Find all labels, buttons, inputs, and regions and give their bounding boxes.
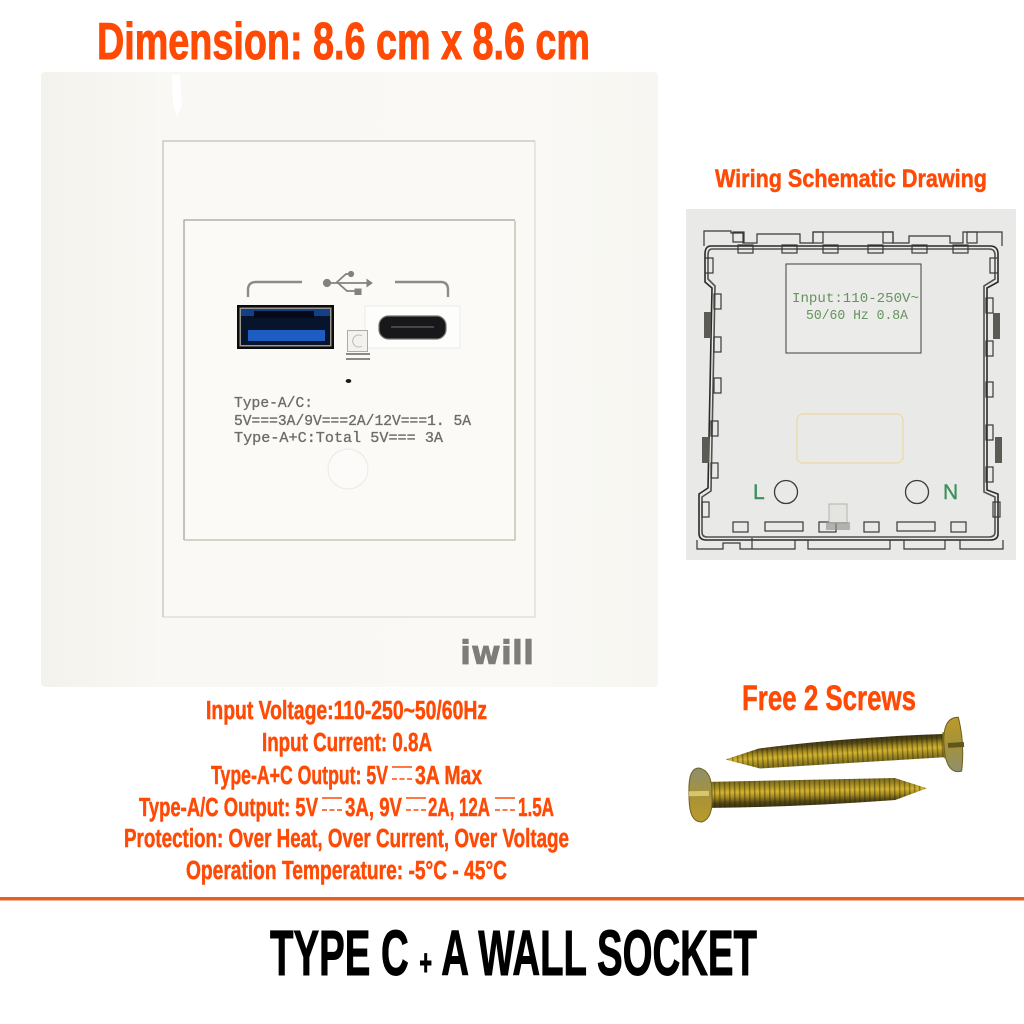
spec list: Type-A+C Output: 5V [211, 762, 388, 790]
icon: left bracket [248, 282, 302, 297]
socket outer plate [41, 72, 658, 687]
icon: upper screw [726, 716, 964, 772]
heading: free screws: Free 2 Screws [742, 679, 916, 718]
usb type-a port [237, 305, 334, 349]
input rating box: 50/60 Hz 0.8A [806, 309, 909, 324]
heading: wiring schematic: Wiring Schematic Drawing [715, 165, 987, 193]
input rating box [786, 264, 921, 353]
icon: lower screw [688, 763, 928, 822]
watermark stamp [826, 504, 850, 530]
printed spec text: Type-A+C:Total 5V=== 3A [234, 430, 443, 447]
socket module face [184, 220, 515, 540]
gloss highlight [172, 75, 182, 117]
label placeholder [797, 414, 903, 463]
spec list: 2A, 12A [428, 794, 490, 822]
touch button [328, 449, 368, 489]
printed spec text: 5V===3A/9V===2A/12V===1. 5A [234, 413, 471, 430]
terminal L: L [753, 481, 765, 504]
spec list: Type-A/C Output: 5V [139, 794, 318, 822]
input rating box: Input:110-250V~ [792, 292, 919, 307]
watermark stamp [346, 330, 370, 360]
socket inner frame [163, 141, 535, 617]
footer title: TYPE C + A WALL SOCKET [270, 917, 757, 989]
module frame outline [697, 231, 1003, 549]
printed spec text: Type-A/C: [234, 395, 313, 412]
terminal N: N [943, 481, 958, 504]
divider line [0, 897, 1024, 900]
panel: wall socket photo [41, 72, 658, 687]
spec list: Protection: Over Heat, Over Current, Over Voltage [124, 825, 569, 853]
spec list: Input Voltage:110-250~50/60Hz [206, 697, 487, 725]
terminal L [753, 480, 798, 504]
schematic paper [686, 209, 1016, 560]
printed spec text [234, 395, 471, 447]
icon: usb trident [323, 271, 372, 294]
spec list [124, 697, 569, 885]
spec list: 3A, 9V [345, 794, 402, 822]
usb type-c port [365, 306, 460, 348]
spec list: Operation Temperature: -5°C - 45°C [186, 857, 507, 885]
spec list: Input Current: 0.8A [262, 729, 432, 757]
indicator dot [346, 379, 351, 383]
brand logo: iwill [460, 633, 534, 672]
panel: wiring schematic [686, 209, 1016, 560]
icon: right bracket [395, 282, 448, 297]
spec list: 3A Max [415, 762, 482, 790]
spec list: 1.5A [518, 794, 554, 822]
title: dimension: Dimension: 8.6 cm x 8.6 cm [97, 13, 590, 71]
terminal N [906, 480, 958, 504]
